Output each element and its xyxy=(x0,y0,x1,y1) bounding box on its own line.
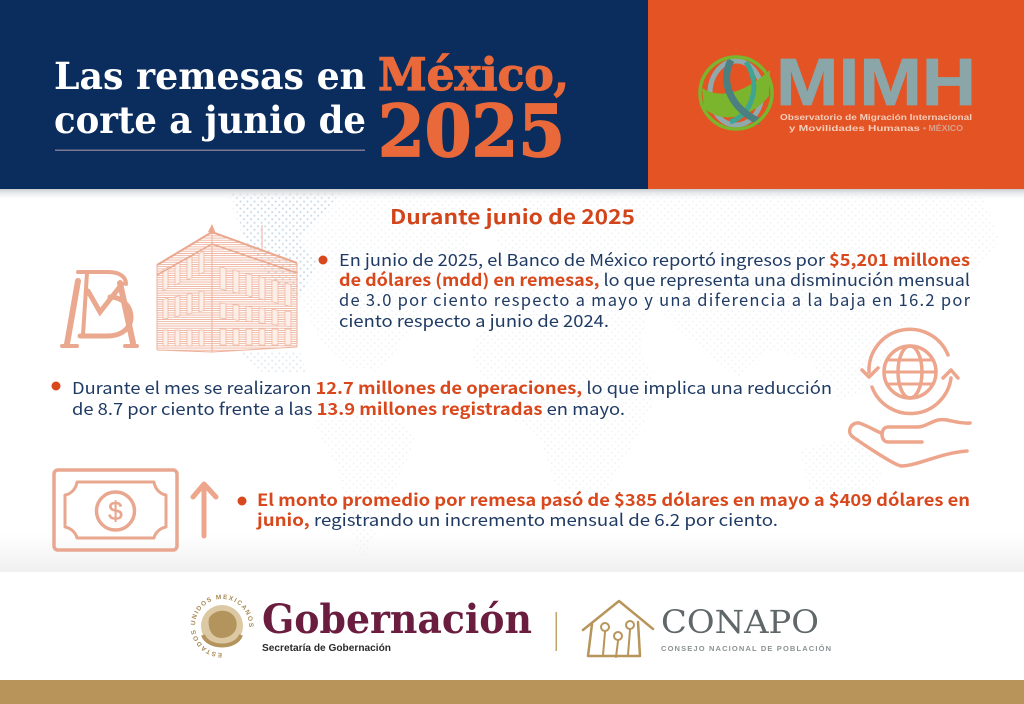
header panel: title xyxy=(0,0,648,189)
section heading: Durante junio de 2025 xyxy=(390,201,635,230)
footer panel xyxy=(190,594,831,658)
logo caption: Observatorio de Migración Internacional xyxy=(780,112,972,122)
icon: up arrow xyxy=(193,484,216,536)
Secretaría caption: Secretaría de Gobernación xyxy=(262,643,391,654)
icon: banknote: $ xyxy=(108,496,123,526)
icon: MIMH globe xyxy=(700,57,772,129)
footer band xyxy=(0,680,1024,704)
icon: banknote xyxy=(54,470,177,550)
MIMH wordmark: MIMH xyxy=(776,45,976,120)
logo caption: y Movilidades Humanas xyxy=(789,123,920,133)
CONAPO caption: CONSEJO NACIONAL DE POBLACIÓN xyxy=(661,644,831,653)
title heading: corte a junio de xyxy=(54,98,366,142)
logo caption xyxy=(780,112,972,133)
Gobernación wordmark: Gobernación xyxy=(262,596,532,643)
header panel: MIMH logo xyxy=(648,0,1024,189)
text block: bullet 2: de 8.7 por ciento frente a las 13.9 millones registradas en mayo. xyxy=(72,396,625,420)
page body background xyxy=(0,189,1024,572)
title heading: Las remesas en xyxy=(54,54,366,98)
text block: bullet 1: ciento respecto a junio de 2024. xyxy=(339,308,609,332)
CONAPO wordmark: CONAPO xyxy=(661,603,819,641)
text block: bullet 2 xyxy=(52,375,832,420)
text block: bullet 1 xyxy=(318,247,971,332)
text block: bullet 1: de dólares (mdd) en remesas, lo que representa una disminución mensual xyxy=(339,267,970,291)
text block: bullet 3: El monto promedio por remesa pasó de $385 dólares en mayo a $409 dólares en xyxy=(257,487,970,511)
icon: Banco de México monogram xyxy=(62,272,137,346)
header shadow xyxy=(0,189,1024,201)
icon: Banco de México building xyxy=(157,224,297,352)
text block: bullet 1: de 3.0 por ciento respecto a mayo y una diferencia a la baja en 16.2 por xyxy=(339,287,971,311)
world map dot background xyxy=(225,190,1000,560)
icon: CONAPO house xyxy=(583,601,653,657)
title heading: 2025 xyxy=(378,89,565,173)
title heading xyxy=(54,48,569,173)
icon: globe in hand xyxy=(850,329,970,466)
icon: national seal: ESTADOS UNIDOS MEXICANOS xyxy=(190,594,254,658)
text block: bullet 2: Durante el mes se realizaron 12.7 millones de operaciones, lo que implica una reducción xyxy=(72,375,832,399)
logo caption: • MÉXICO xyxy=(923,123,963,133)
text block: bullet 3: junio, registrando un incremento mensual de 6.2 por ciento. xyxy=(256,507,778,531)
text block: bullet 3 xyxy=(238,487,970,531)
title heading: México, xyxy=(378,48,569,101)
text block: bullet 1: En junio de 2025, el Banco de México reportó ingresos por $5,201 millones xyxy=(339,247,970,271)
